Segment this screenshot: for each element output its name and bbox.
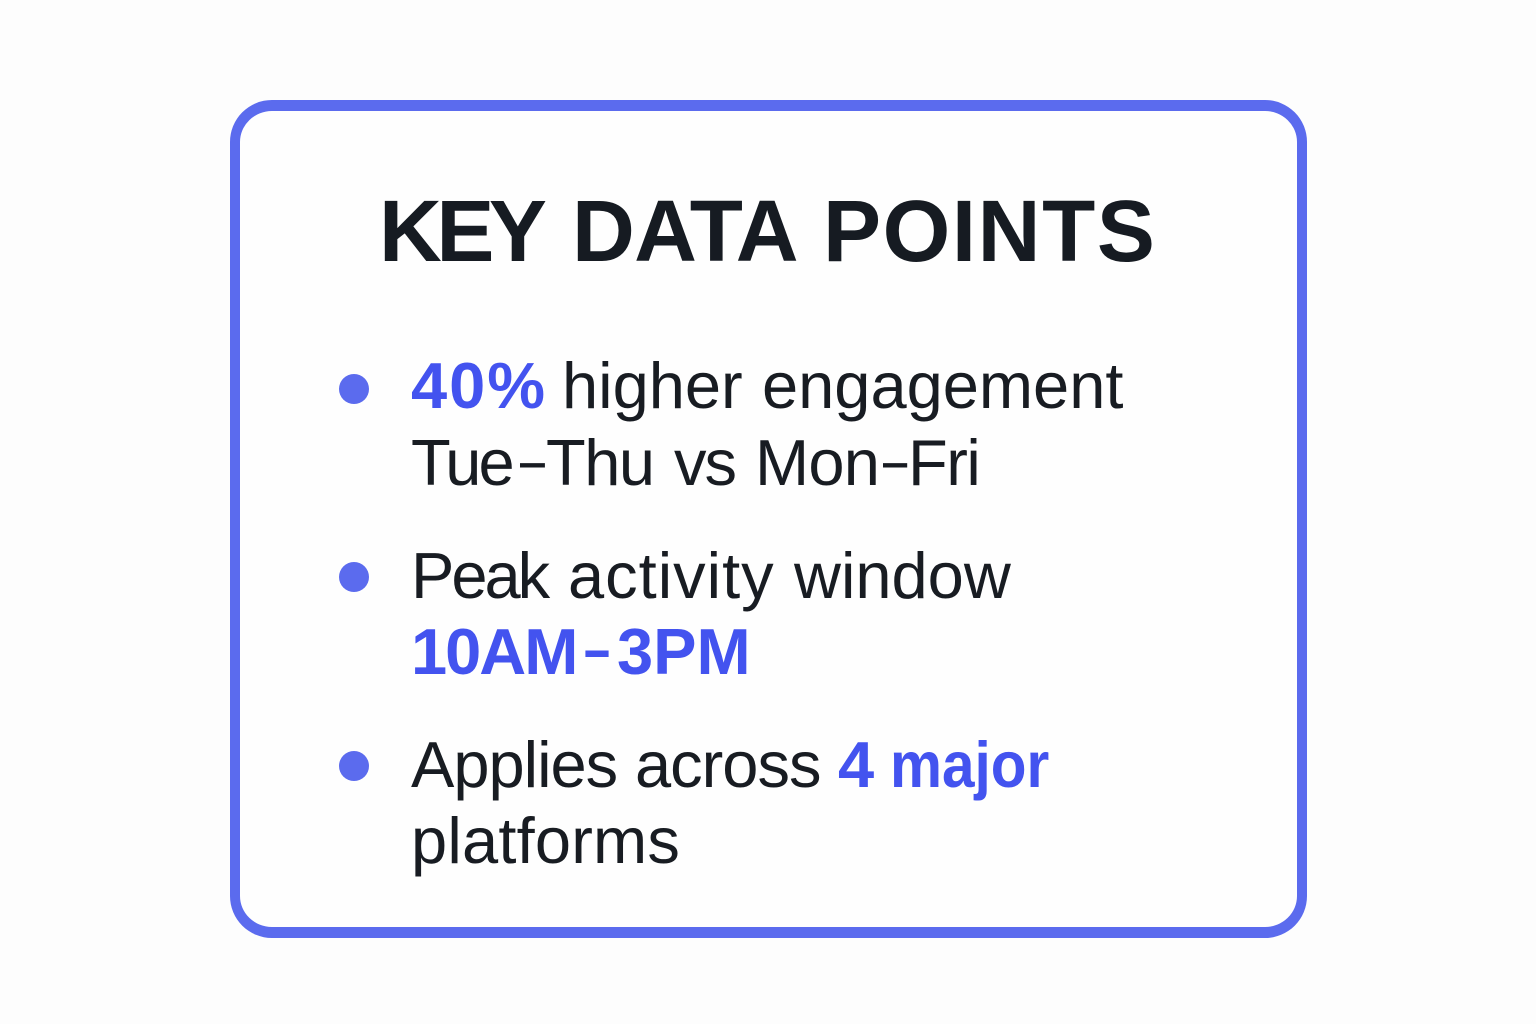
text block: platforms line 1 xyxy=(411,728,1049,801)
title xyxy=(379,183,1156,280)
bullet icon 2 xyxy=(338,562,369,592)
text block: platforms line 2: platforms xyxy=(411,804,680,877)
text block: platforms line 1: Applies xyxy=(411,728,617,801)
text block: engagement line 2: – xyxy=(883,423,907,496)
text block: peak activity line 1: Peak xyxy=(411,539,547,612)
text block: engagement line 1: higher xyxy=(562,349,743,422)
text block: peak activity line 1: window xyxy=(794,539,1011,612)
text block: platforms line 1: across xyxy=(635,728,820,801)
text block: engagement line 1: engagement xyxy=(762,349,1123,422)
panel: key data points card xyxy=(230,100,1307,938)
text block: engagement line 2: vs xyxy=(674,426,735,499)
title: POINTS xyxy=(823,183,1156,280)
title: KEY xyxy=(379,183,541,280)
bullet icon 1 xyxy=(338,374,369,404)
text block: engagement line 2: – xyxy=(520,423,545,496)
text block: engagement line 2: Tue xyxy=(411,426,512,499)
text block: platforms line 1: 4 xyxy=(838,728,874,801)
text block: engagement line 2: Mon xyxy=(755,426,879,499)
text block: peak activity line 2 xyxy=(411,612,751,688)
text block: peak activity line 1: activity xyxy=(568,539,775,612)
text block: peak activity line 2: 10AM xyxy=(411,615,576,688)
bullet icon 3 xyxy=(338,750,369,781)
text block: engagement line 2: Fri xyxy=(908,426,979,499)
text block: engagement line 2 xyxy=(411,423,979,499)
text block: platforms line 1: major xyxy=(890,728,1049,801)
text block: peak activity line 2: 3PM xyxy=(617,615,751,688)
text block: peak activity line 1 xyxy=(411,539,1011,612)
title: DATA xyxy=(572,183,798,280)
text block: peak activity line 2: – xyxy=(584,612,610,685)
text block: engagement line 1 xyxy=(411,349,1123,422)
text block: engagement line 2: Thu xyxy=(546,426,654,499)
text block: engagement line 1: 40% xyxy=(411,349,547,422)
